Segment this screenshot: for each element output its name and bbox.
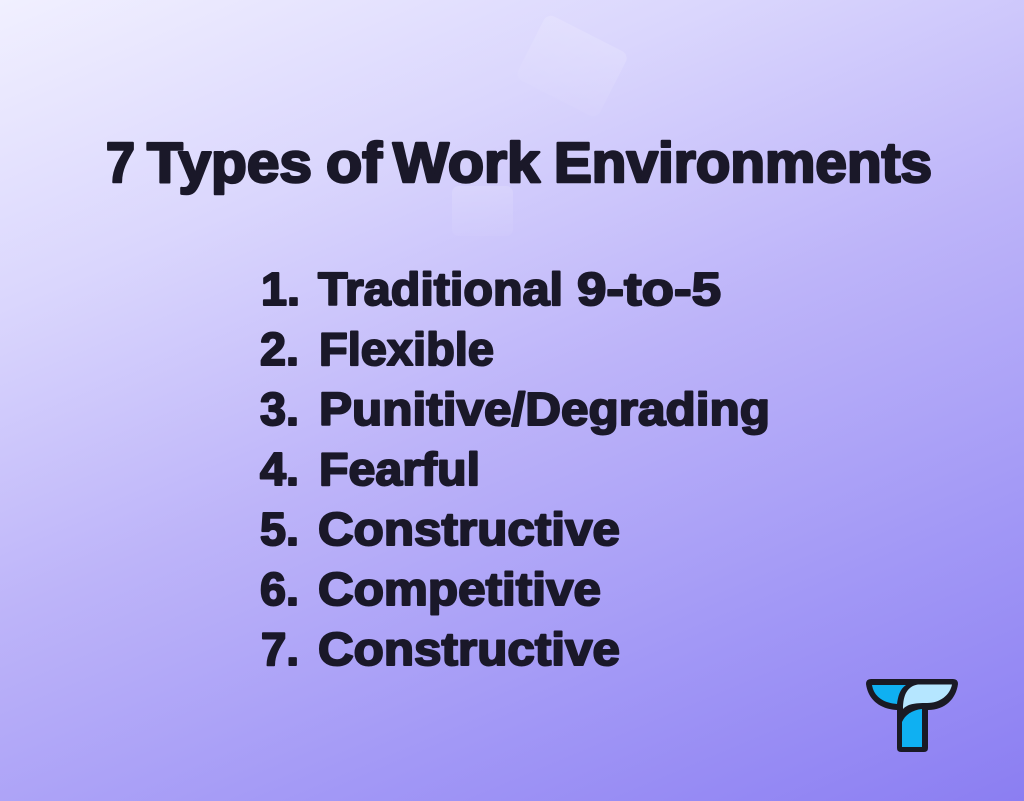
decorative small square bbox=[452, 186, 513, 236]
numbered list bbox=[260, 263, 770, 675]
list item 5: 5. bbox=[260, 503, 299, 555]
list item 2: 2. bbox=[260, 323, 299, 375]
list item 3: 3. bbox=[260, 383, 299, 435]
list item 3: Punitive/Degrading bbox=[319, 383, 770, 435]
list item 4 bbox=[260, 443, 480, 495]
list item 5: Constructive bbox=[318, 503, 620, 555]
list item 6: 6. bbox=[260, 563, 299, 615]
icon: T logo bbox=[866, 679, 958, 752]
title: 7 bbox=[106, 131, 135, 195]
title: Types bbox=[147, 131, 312, 195]
list item 1: 1. bbox=[261, 263, 300, 315]
list item 7: Constructive bbox=[318, 623, 620, 675]
list item 4: Fearful bbox=[319, 443, 480, 495]
list item 6: Competitive bbox=[318, 563, 601, 615]
list item 7: 7. bbox=[261, 623, 299, 675]
list item 4: 4. bbox=[260, 443, 299, 495]
list item 1: Traditional bbox=[318, 263, 563, 315]
decorative tilted square bbox=[515, 13, 629, 119]
list item 1 bbox=[261, 263, 721, 315]
title: Work bbox=[393, 131, 540, 195]
title: Environments bbox=[554, 131, 932, 195]
title: of bbox=[326, 131, 383, 195]
list item 1: 9-to-5 bbox=[577, 263, 721, 315]
title bbox=[106, 131, 932, 195]
list item 2: Flexible bbox=[319, 323, 494, 375]
